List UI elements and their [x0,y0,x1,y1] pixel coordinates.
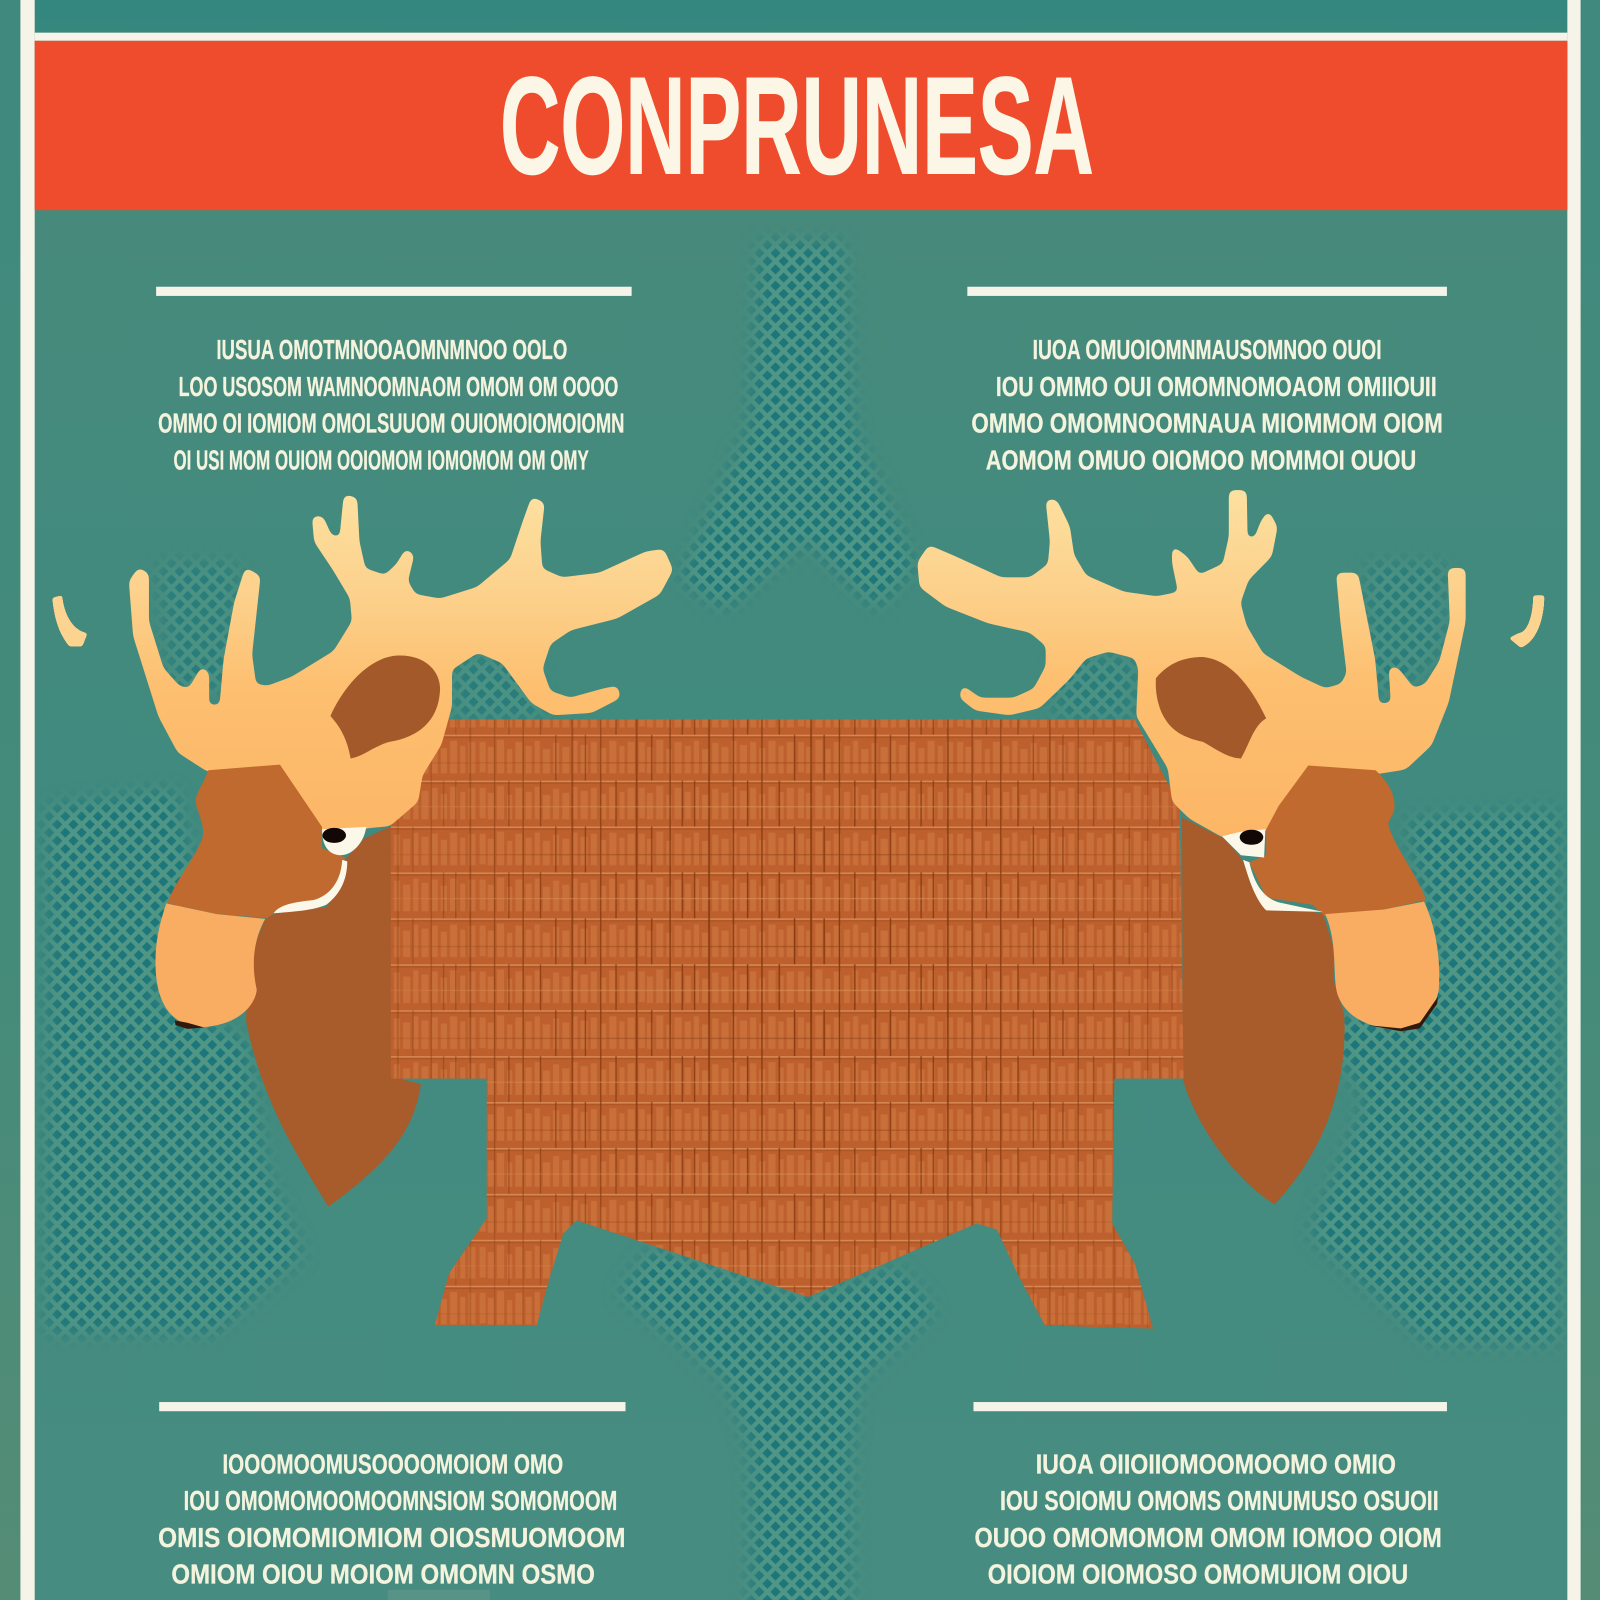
text block: top left [156,287,632,475]
text block: top right: OMMO OMOMNOOMNAUA MIOMMOM OIOM [971,408,1443,439]
left upper muzzle [168,765,345,918]
bottom edge smudge [388,1590,490,1600]
text block: top left: IUSUA OMOTMNOOAOMNMNOO OOLO [216,334,567,365]
right upper muzzle [1249,766,1426,917]
moose body with woven texture [388,719,1194,1332]
left mouth line [274,860,347,913]
text block: top right: IUOA OMUOIOMNMAUSOMNOO OUOI [1033,334,1382,365]
left moose head [130,497,671,1029]
title: CONPRUNESA [500,48,1094,203]
text block: top left: LOO USOSOM WAMNOOMNAOM OMOM OM OOOO [179,371,618,402]
left crescent mark [53,596,87,646]
right eye [1222,829,1265,858]
left mouth mark [175,1020,204,1029]
text block: top right: AOMOM OMUO OIOMOO MOMMOI OUOU [986,444,1416,475]
left eye [322,827,366,855]
left neck [246,827,421,1207]
text block: top right [967,287,1447,475]
text block: bottom right [973,1402,1447,1590]
text block: bottom left: IOU OMOMOMOOMOOMNSIOM SOMOMOOM [184,1485,617,1516]
text block: bottom right: OUOO OMOMOMOM OMOM IOMOO OIOM [974,1522,1442,1553]
right mouth mark [1367,997,1438,1031]
left antlers and head [130,497,671,843]
right moose head [919,492,1464,1031]
right antlers and head [919,492,1464,836]
right crescent mark [1509,596,1544,648]
text block: bottom left: IOOOMOOMUSOOOOMOIOM OMO [222,1448,563,1479]
right lower muzzle [1325,901,1439,1030]
text block: bottom right: IOU SOIOMU OMOMS OMNUMUSO OSUOII [1000,1485,1439,1516]
text block: bottom left [158,1402,626,1590]
text block: bottom left: OMIS OIOMOMIOMIOM OIOSMUOMOOM [158,1522,626,1553]
right mouth line [1243,860,1323,912]
title banner [35,41,1567,210]
right neck [1182,817,1345,1204]
text block: bottom left: OMIOM OIOU MOIOM OMOMN OSMO [171,1559,595,1590]
right edge strip [1582,0,1600,1600]
text block: bottom right: IUOA OIIOIIOMOOMOOMO OMIO [1036,1448,1396,1479]
right ear [1156,657,1266,758]
text block: top left: OMMO OI IOMIOM OMOLSUUOM OUIOMOIOMOIOMN [158,408,624,439]
left edge strip [0,0,20,1600]
left lower muzzle [155,903,265,1027]
left ear [330,656,440,758]
text block: top left: OI USI MOM OUIOM OOIOMOM IOMOMOM OM OMY [173,444,589,475]
text block: bottom right: OIOIOM OIOMOSO OMOMUIOM OIOU [988,1559,1408,1590]
text block: top right: IOU OMMO OUI OMOMNOMOAOM OMIIOUII [996,371,1437,402]
